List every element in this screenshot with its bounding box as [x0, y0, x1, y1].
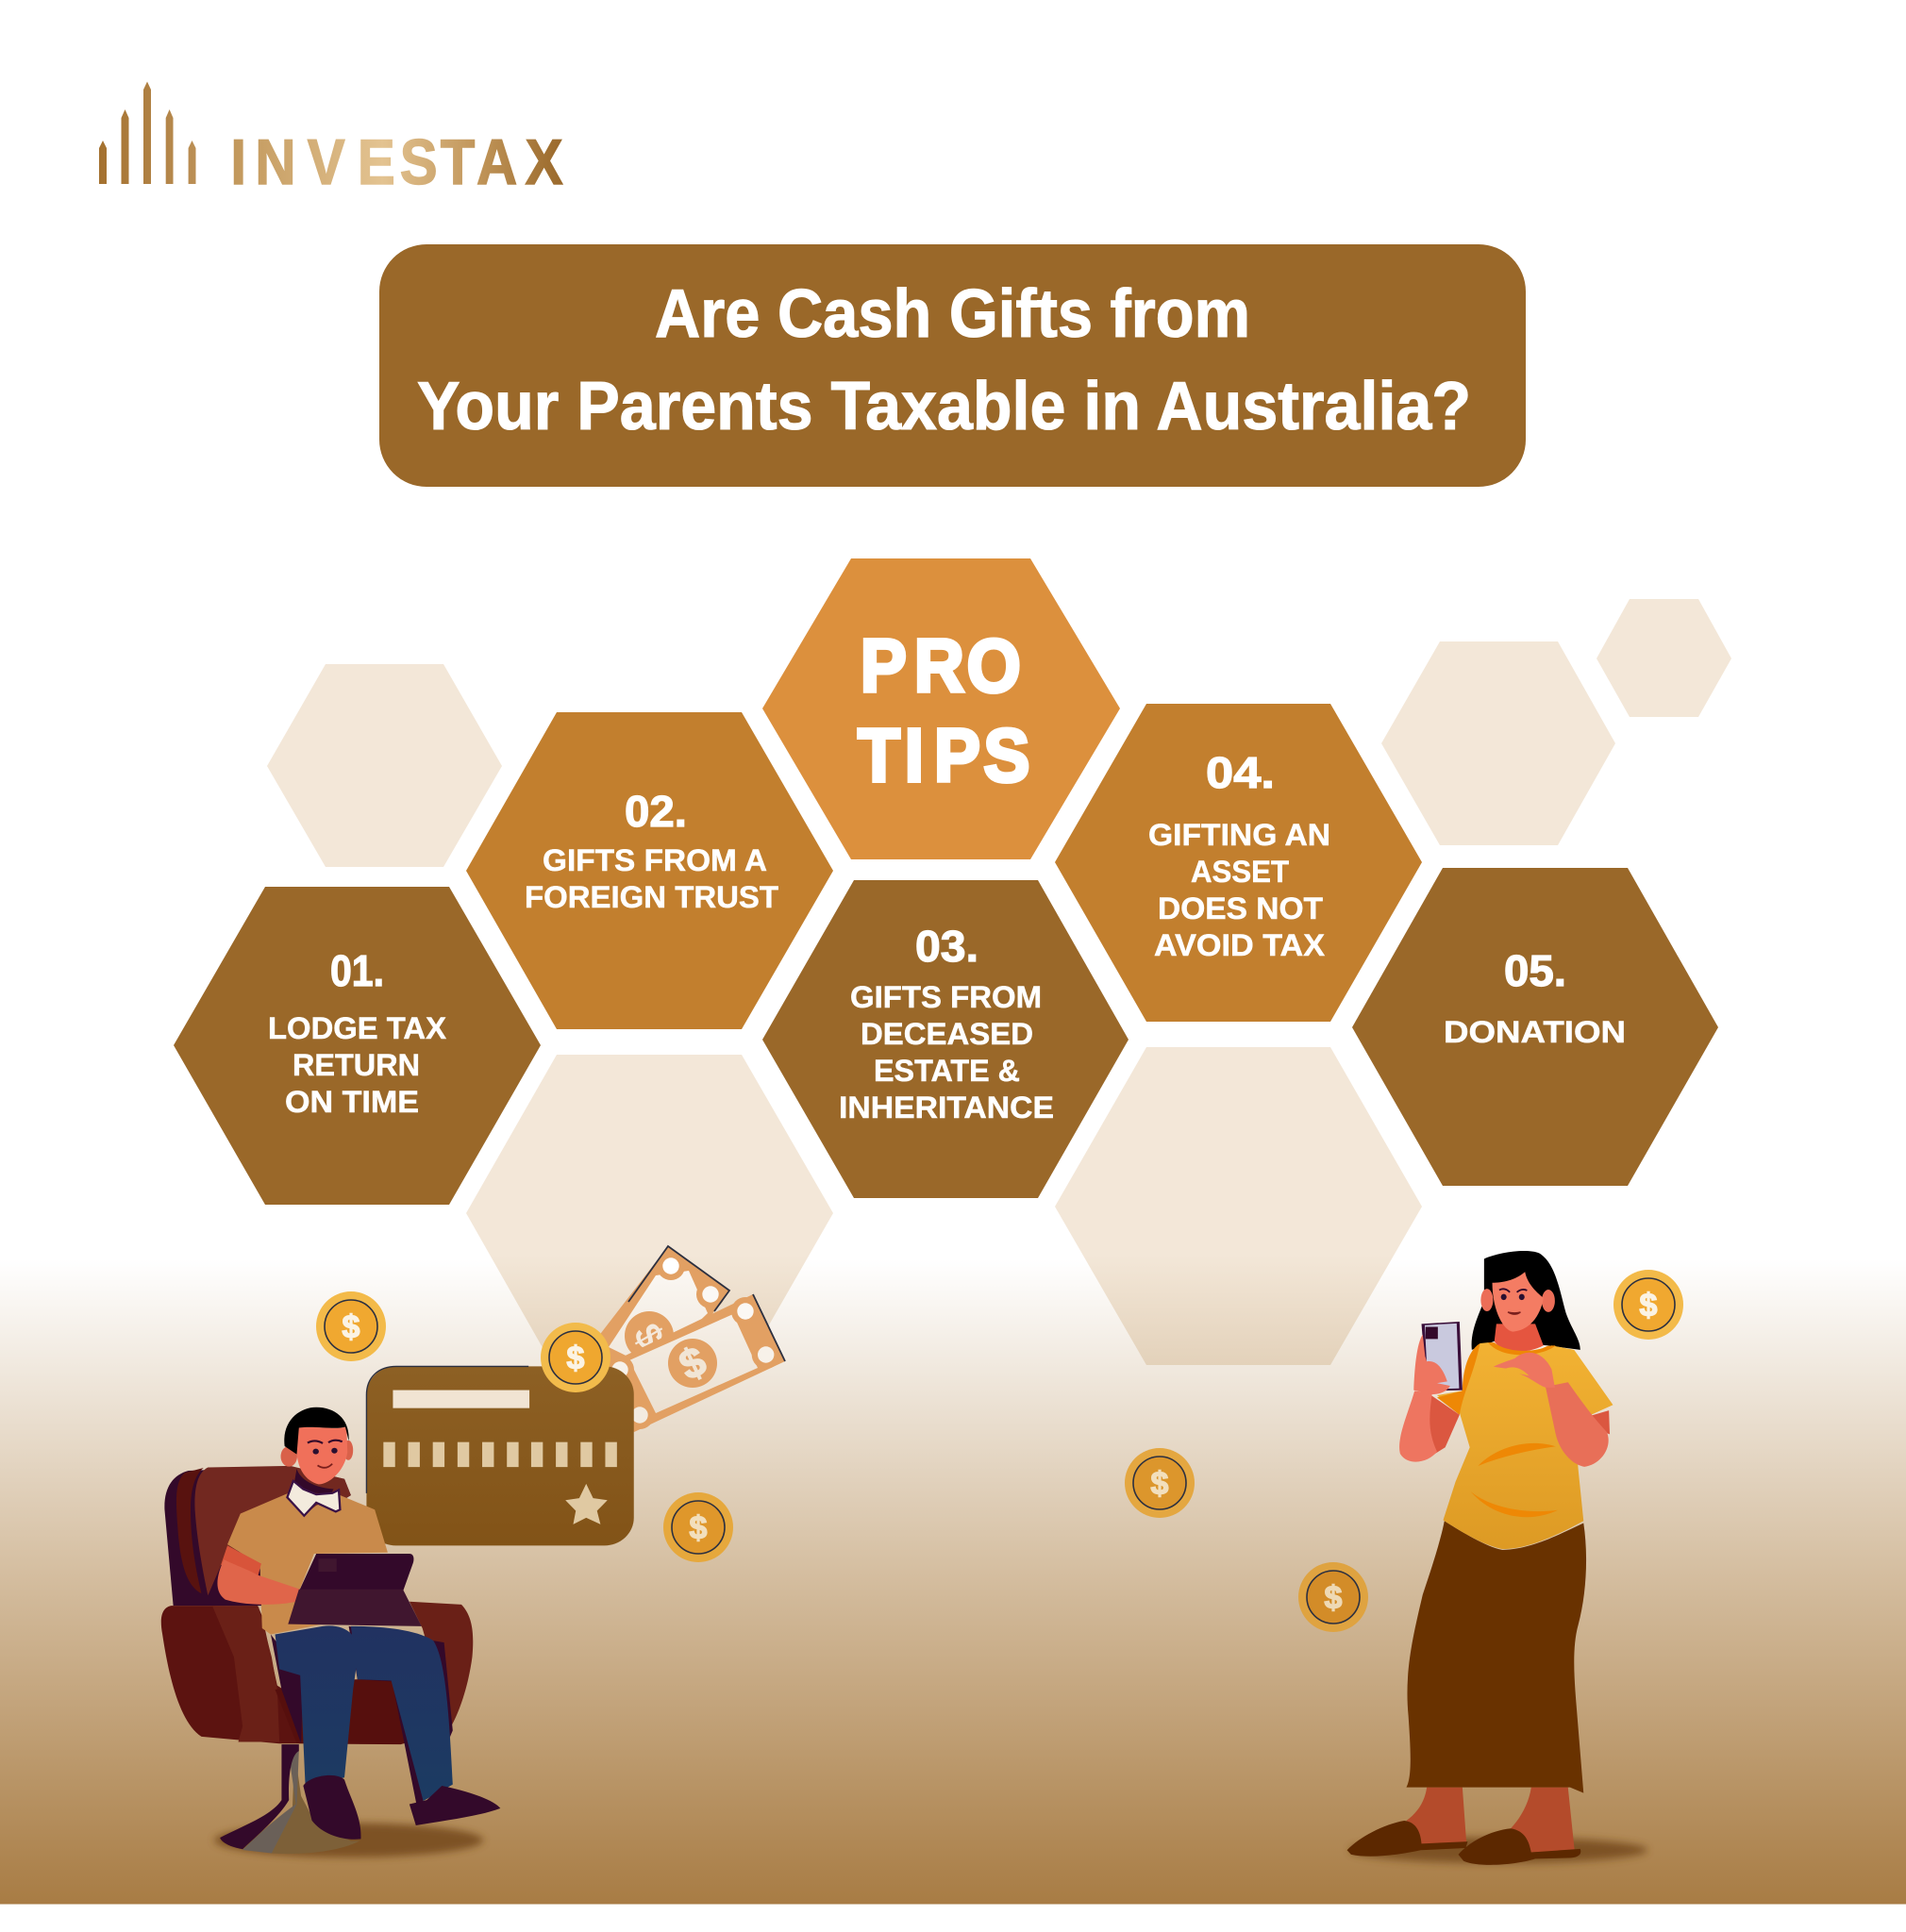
man: jeans: [276, 1625, 453, 1812]
tip 03 label: GIFTS FROM: [850, 980, 1042, 1014]
pro tips heading: PRO: [861, 624, 1021, 708]
tip 04 label: ASSET: [1191, 855, 1289, 889]
man: collar: [287, 1481, 340, 1516]
icon: banknotes: [585, 1246, 785, 1432]
tip 03 label: INHERITANCE: [839, 1091, 1054, 1124]
back banknote: $: [626, 1317, 672, 1356]
tip 03 number: 03.: [915, 922, 978, 971]
title text: [417, 276, 1471, 444]
panel: tip 04: [1055, 704, 1422, 1022]
background gradient: [0, 1226, 1906, 1904]
title banner: [379, 244, 1526, 487]
tip 04 number: 04.: [1206, 748, 1275, 797]
panel: tip 03: [762, 880, 1129, 1198]
icon: coin top right: [1613, 1270, 1683, 1340]
woman: hair: [1472, 1251, 1580, 1350]
panel: tip 02: [466, 712, 833, 1029]
tip 04 label: DOES NOT: [1158, 891, 1323, 925]
woman: arms: [1399, 1382, 1610, 1467]
tip 05 number: 05.: [1504, 946, 1566, 995]
tip 03 label: DECEASED: [861, 1017, 1033, 1051]
man: sleeve and arm: [217, 1545, 300, 1605]
man: sweater: [227, 1493, 388, 1634]
tip 01 label: [268, 1011, 447, 1119]
pro tips heading: TIPS: [858, 713, 1029, 798]
icon: coin beside card: [663, 1492, 733, 1562]
man: tablet: [288, 1554, 422, 1626]
illustration: woman with phone: [1347, 1251, 1647, 1865]
tip 01 number: 01.: [330, 946, 384, 995]
panel: tip 01: [174, 887, 541, 1205]
tip 04 label: GIFTING AN: [1148, 818, 1330, 852]
front banknote: $: [673, 1338, 713, 1390]
tip 04 label: [1148, 818, 1330, 962]
tip 02 label: [525, 843, 778, 914]
icon: coin beside card: $: [690, 1510, 708, 1546]
tip 02 number: 02.: [625, 787, 687, 836]
logo wordmark: INVESTAX: [230, 125, 563, 198]
banner background: [379, 244, 1526, 487]
man: head: [281, 1407, 353, 1493]
woman: legs: [1406, 1788, 1575, 1853]
woman: neck and face: [1480, 1272, 1555, 1352]
title text: Are Cash Gifts from: [655, 276, 1250, 352]
icon: coin top left: [316, 1291, 386, 1361]
icon: coin centre: [1125, 1448, 1195, 1518]
icon: coin on card: $: [567, 1341, 585, 1376]
tip 01 label: LODGE TAX: [268, 1011, 447, 1045]
front banknote: [590, 1294, 785, 1432]
panel: pro tips hexagon: [762, 558, 1120, 859]
armchair: [161, 1466, 473, 1744]
icon: coin lower centre: $: [1325, 1580, 1343, 1616]
floor shadow: [1349, 1837, 1647, 1863]
tip 02 label: FOREIGN TRUST: [525, 880, 778, 914]
back banknote: [585, 1246, 729, 1387]
tip 04 label: AVOID TAX: [1154, 928, 1326, 962]
pro tips heading: [858, 624, 1029, 798]
chair base: [220, 1744, 359, 1854]
logo icon: bars: [99, 81, 196, 184]
woman: t-shirt: [1437, 1342, 1613, 1549]
tip 01 label: ON TIME: [285, 1085, 419, 1119]
tip 05 label: DONATION: [1444, 1015, 1626, 1049]
tip 02 label: GIFTS FROM A: [543, 843, 767, 877]
floor shadow under chair: [214, 1823, 483, 1857]
tip 03 label: [839, 980, 1054, 1124]
icon: coin top right: $: [1640, 1288, 1658, 1324]
panel: tip 05: [1352, 868, 1718, 1186]
icon: coin lower centre: [1298, 1562, 1368, 1632]
tip 03 label: ESTATE &: [874, 1054, 1020, 1088]
credit card: [366, 1366, 634, 1545]
decorative light hexagons: [267, 599, 1731, 1373]
illustration: man and credit card: [161, 1366, 634, 1857]
man: shoes: [303, 1775, 500, 1840]
icon: coin on card: [541, 1323, 610, 1392]
tip 01 label: RETURN: [293, 1048, 420, 1082]
logo: [99, 81, 563, 198]
title text: Your Parents Taxable in Australia?: [417, 369, 1471, 444]
woman: slippers: [1347, 1821, 1580, 1865]
woman: skirt: [1406, 1521, 1586, 1793]
woman: hands: [1413, 1335, 1555, 1394]
icon: coin top left: $: [343, 1309, 360, 1345]
woman: phone: [1422, 1322, 1463, 1391]
icon: coin centre: $: [1151, 1466, 1169, 1502]
